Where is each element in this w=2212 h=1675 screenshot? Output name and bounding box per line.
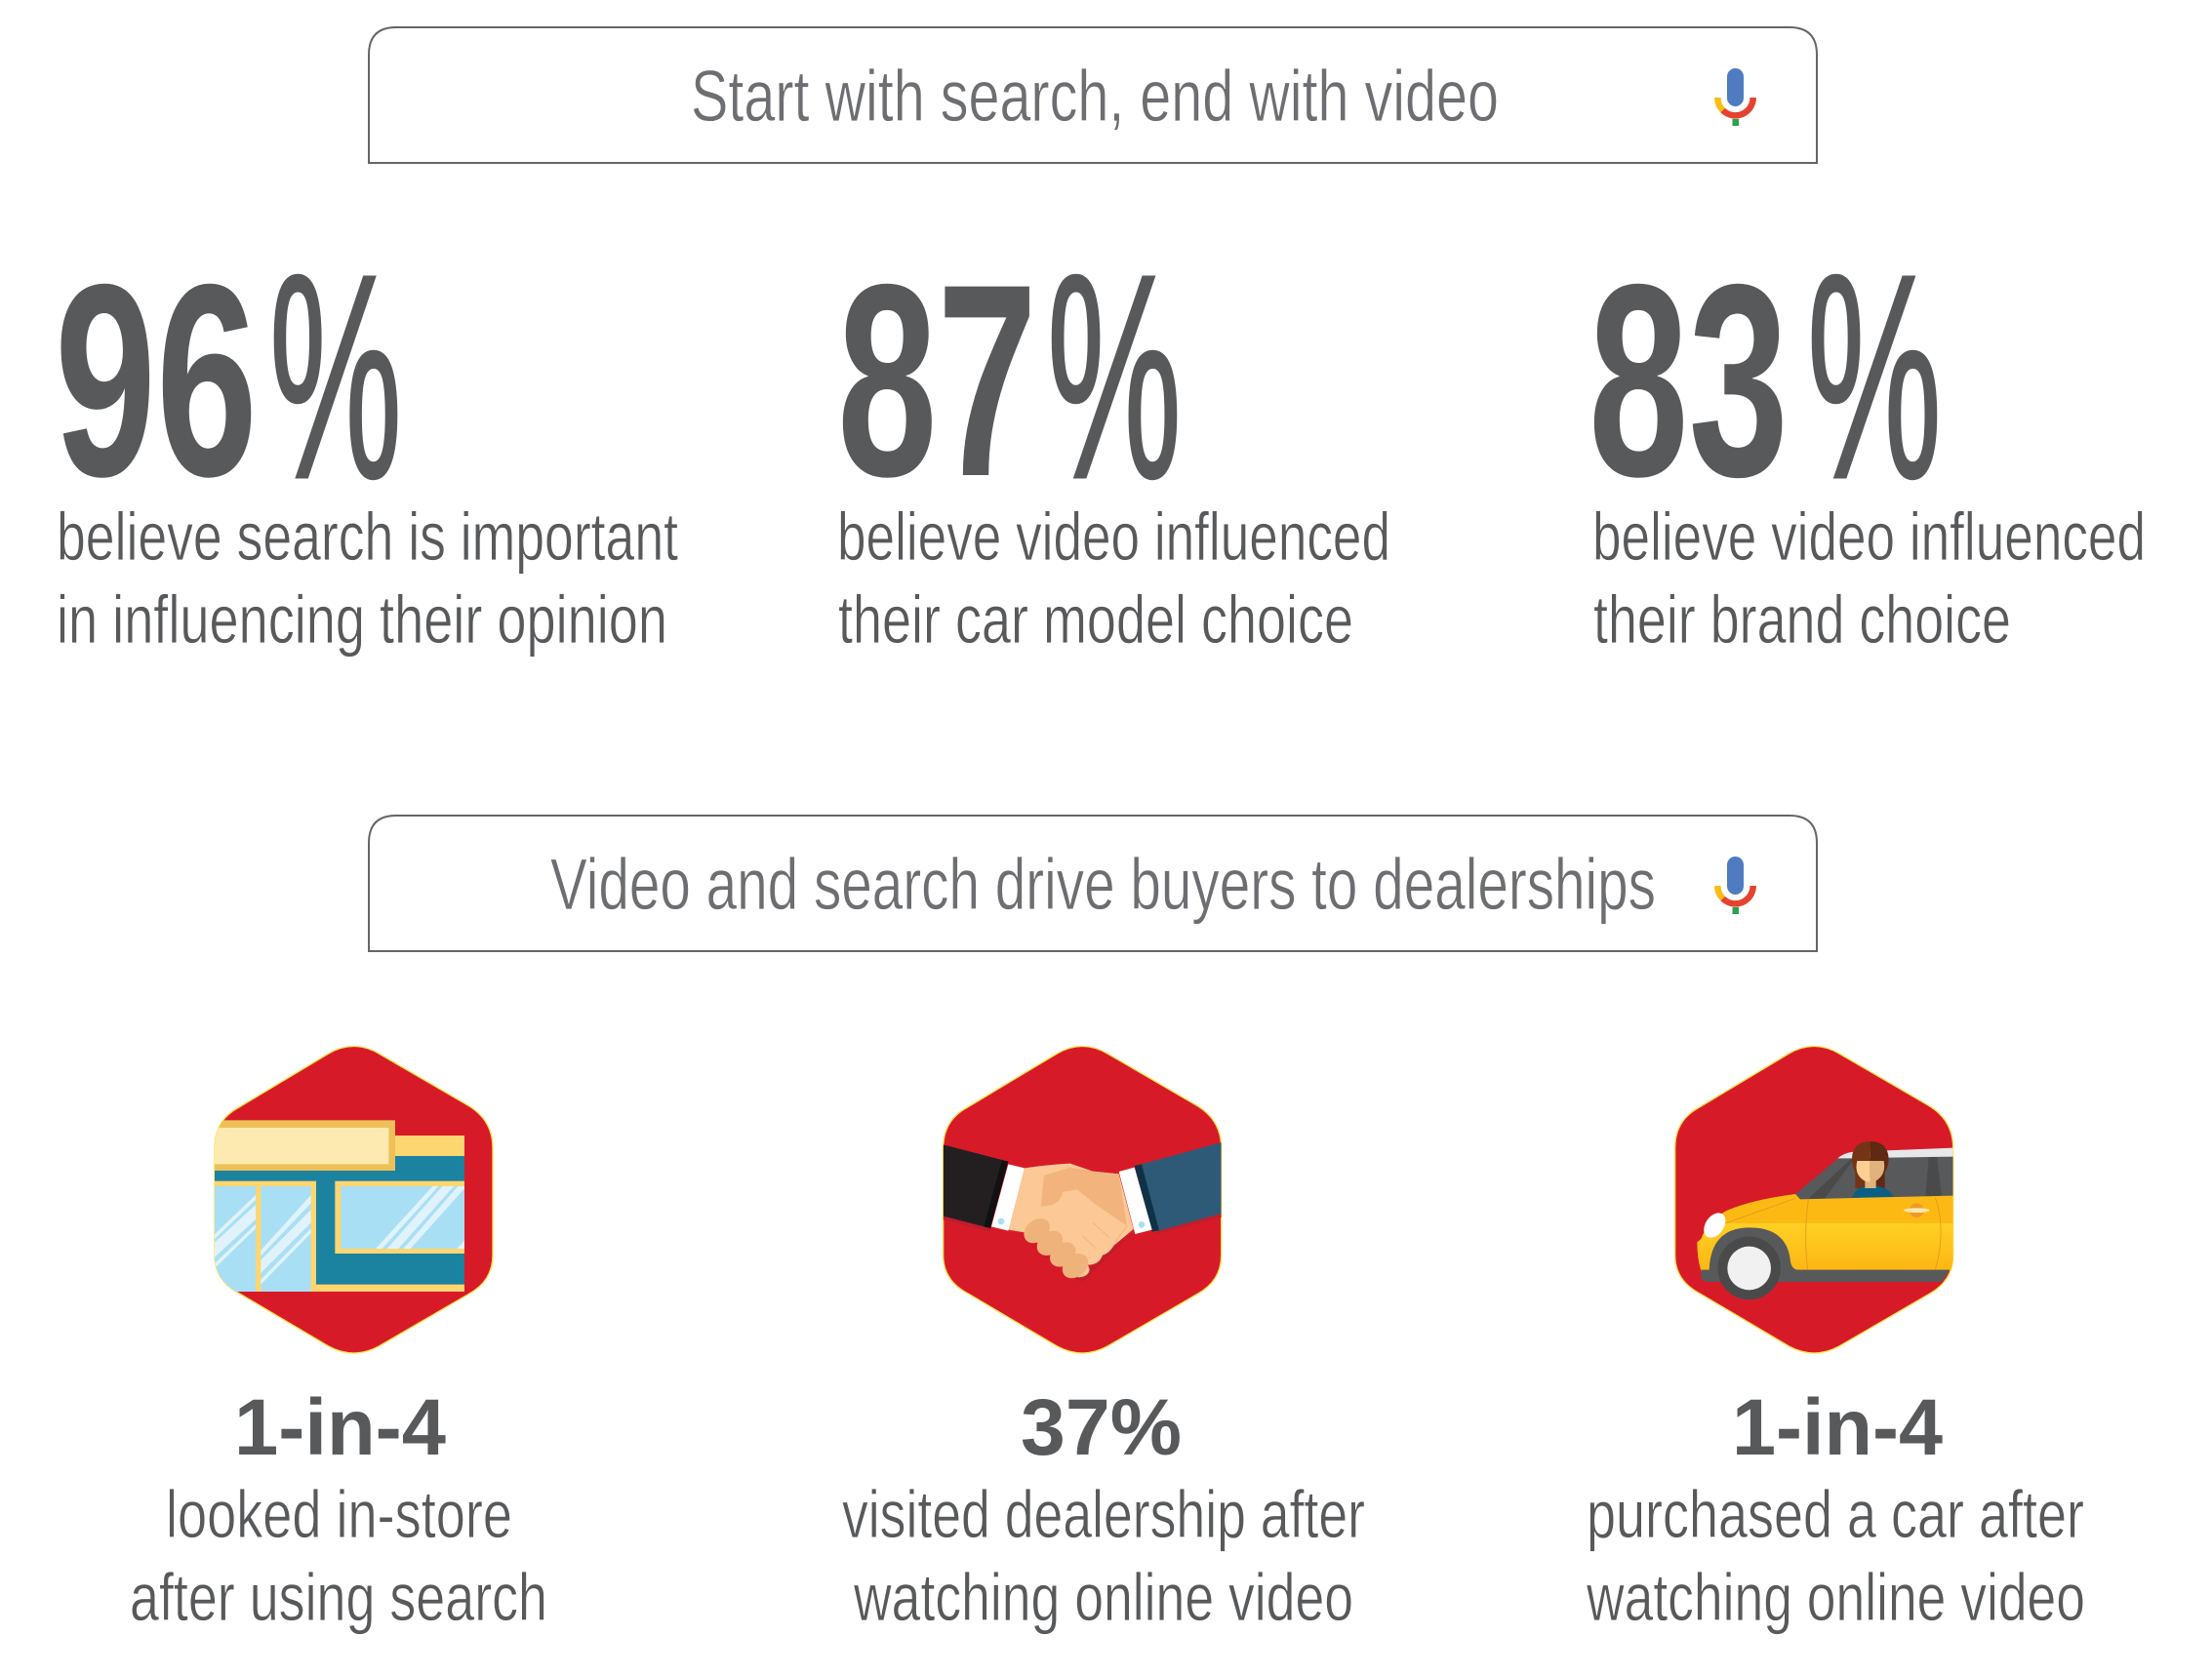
stat: 83%: 83 — [1589, 227, 1789, 534]
stat: 87%: 87 — [837, 227, 1037, 534]
stat: 87%: their car model choice — [838, 581, 1353, 658]
stat: 1-in-4 looked in-store: looked in-store — [166, 1477, 512, 1552]
stat: 87% — [837, 215, 1390, 658]
stat: 1-in-4 purchased a car — [1586, 1383, 2085, 1635]
stat: 87%: believe video influenced — [837, 499, 1390, 575]
stat: 83%: their brand choice — [1593, 581, 2011, 658]
stat: 1-in-4 looked in-store: 1-in-4 — [234, 1383, 446, 1472]
search box: video and search — [369, 816, 1817, 951]
stat: 1-in-4 purchased a car: purchased a car after — [1587, 1477, 2084, 1552]
stat: 1-in-4 looked in-store — [130, 1383, 547, 1635]
stat: 1-in-4 purchased a car: 1-in-4 — [1732, 1383, 1943, 1472]
heading: video and search: Video and search drive buyers to dealerships — [550, 844, 1656, 925]
stat: 37% visited dealership — [842, 1383, 1365, 1635]
stat: 96%: believe search is important — [57, 499, 678, 575]
search box: start with search — [369, 27, 1817, 163]
stat: 96%: in influencing their opinion — [57, 581, 667, 658]
stat: 87%: % — [1047, 215, 1182, 539]
stat: 37% visited dealership: visited dealership after — [842, 1477, 1365, 1552]
icon: handshake hexagon — [944, 1046, 1222, 1353]
stat: 83%: % — [1807, 215, 1942, 539]
stat: 83% — [1589, 215, 2146, 658]
stat: 96% — [55, 215, 678, 658]
stat: 96%: 96 — [55, 227, 258, 534]
heading: start with search: Start with search, end with video — [691, 56, 1499, 137]
stat: 37% visited dealership: watching online video — [853, 1560, 1353, 1635]
stat: 1-in-4 looked in-store: after using search — [130, 1560, 547, 1635]
icon: car hexagon — [1675, 1046, 1953, 1353]
stat: 37% visited dealership: 37% — [1021, 1383, 1182, 1472]
stat: 96%: % — [269, 215, 402, 539]
stat: 1-in-4 purchased a car: watching online video — [1586, 1560, 2085, 1635]
icon: store hexagon — [212, 1046, 493, 1353]
icon: microphone — [1717, 68, 1753, 126]
icon: microphone — [1717, 857, 1753, 914]
